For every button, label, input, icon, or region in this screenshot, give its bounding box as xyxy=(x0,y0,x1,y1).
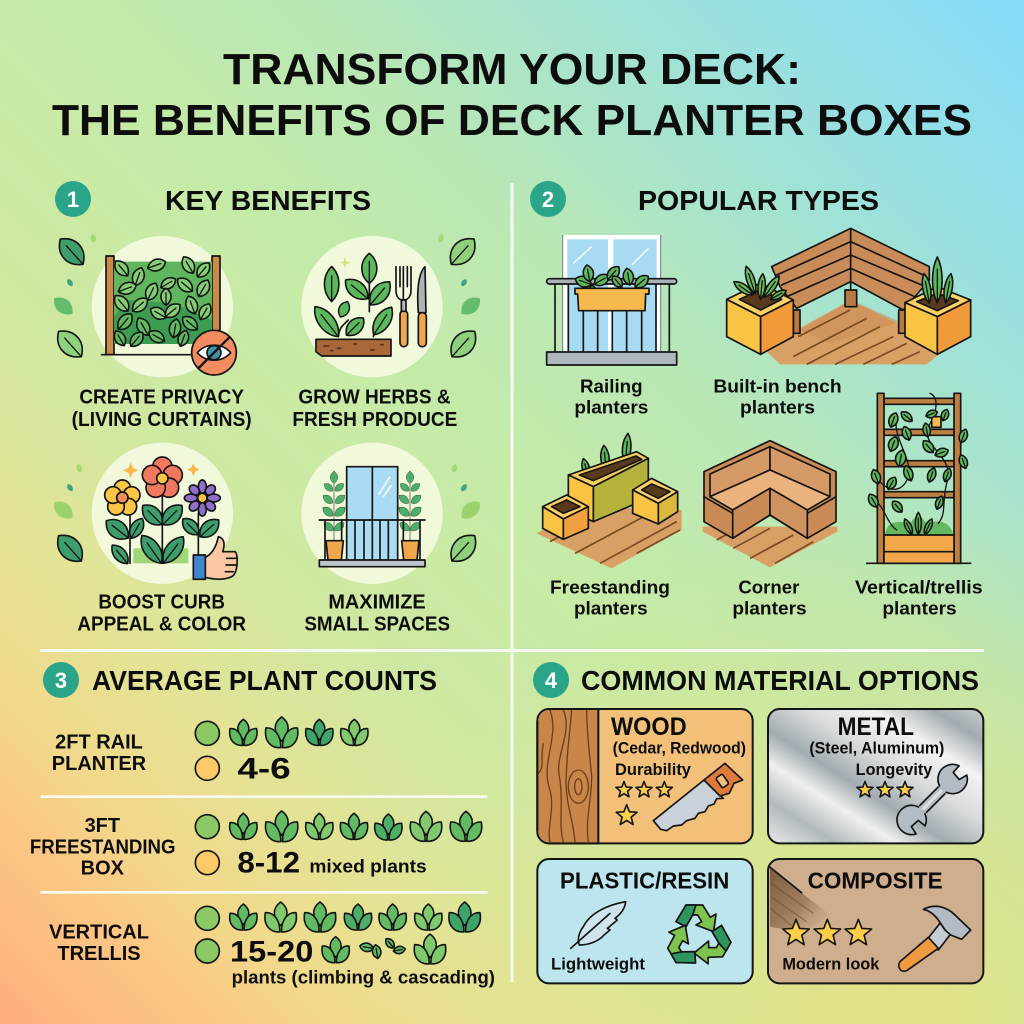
label: maximize small spaces: SMALL SPACES xyxy=(304,614,450,636)
icon: balcony small space xyxy=(319,467,425,567)
row: 2ft rail planter: 4-6 xyxy=(237,752,291,785)
title: TRANSFORM YOUR DECK: xyxy=(223,45,801,94)
row: 2ft rail planter xyxy=(52,717,368,785)
label: freestanding planters: planters xyxy=(574,597,648,618)
label: railing planters xyxy=(574,375,648,417)
heading: popular types xyxy=(530,181,879,217)
card: plastic/resin xyxy=(537,859,753,983)
icon: living curtain privacy hedge xyxy=(102,254,220,355)
icon: herbs and cutlery xyxy=(309,253,426,356)
card: metal xyxy=(768,709,983,843)
card: composite: COMPOSITE xyxy=(808,867,943,893)
icon: corner planter xyxy=(703,441,837,567)
heading: popular types: POPULAR TYPES xyxy=(638,185,879,216)
row: 3ft freestanding box xyxy=(30,811,482,880)
panel: popular types xyxy=(530,181,983,618)
heading: popular types: 2 xyxy=(542,187,554,212)
label: grow herbs xyxy=(292,386,457,431)
card: wood xyxy=(537,709,753,843)
row: 2ft rail planter: 2FT RAIL xyxy=(55,732,143,754)
label: maximize small spaces: MAXIMIZE xyxy=(328,591,426,613)
row: 2ft rail planter: PLANTER xyxy=(52,753,147,775)
row: vertical trellis: VERTICAL xyxy=(49,922,149,944)
icon circle backgrounds xyxy=(92,236,443,584)
label: grow herbs: GROW HERBS & xyxy=(298,386,451,408)
row: 3ft freestanding box: BOX xyxy=(81,858,125,880)
row: 3ft freestanding box: FREESTANDING xyxy=(30,836,175,858)
icon: hammer xyxy=(899,906,971,971)
row: vertical trellis xyxy=(49,902,495,987)
heading: key benefits xyxy=(55,181,371,217)
card: composite xyxy=(768,859,983,983)
card: metal: METAL xyxy=(838,714,914,741)
label: vertical trellis planters: Vertical/trellis xyxy=(855,576,983,597)
label: corner planters: planters xyxy=(732,597,807,618)
icon: saw xyxy=(653,763,743,831)
row: vertical trellis: plants (climbing & cascading) xyxy=(232,966,495,987)
label: boost curb appeal xyxy=(77,591,247,636)
decorative leaves xyxy=(50,232,484,568)
row: 3ft freestanding box: 8-12 xyxy=(237,847,300,880)
icon: no-see eye xyxy=(192,330,236,375)
label: boost curb appeal: BOOST CURB xyxy=(98,591,225,613)
label: freestanding planters xyxy=(550,576,670,618)
card: wood: WOOD xyxy=(611,714,687,741)
heading: average plant counts: 3 xyxy=(55,668,67,693)
label: freestanding planters: Freestanding xyxy=(550,576,670,597)
icon: railing planter xyxy=(547,235,677,365)
card: wood: Durability xyxy=(615,760,692,779)
heading: key benefits: 1 xyxy=(67,187,79,212)
card: plastic/resin: Lightweight xyxy=(551,954,645,973)
heading: key benefits: KEY BENEFITS xyxy=(165,185,371,216)
row: vertical trellis: 15-20 xyxy=(230,936,313,969)
label: corner planters: Corner xyxy=(738,576,799,597)
card: metal: (Steel, Aluminum) xyxy=(809,738,944,757)
label: grow herbs: FRESH PRODUCE xyxy=(292,409,457,431)
label: vertical trellis planters: planters xyxy=(882,597,957,618)
label: built-in bench planters: Built-in bench xyxy=(713,375,842,396)
icon: wrench xyxy=(891,759,972,840)
label: corner planters xyxy=(732,576,807,618)
icon: feather xyxy=(571,902,626,948)
card: plastic/resin: PLASTIC/RESIN xyxy=(560,867,729,893)
row: 3ft freestanding box: 3FT xyxy=(85,815,120,837)
panel: key benefits xyxy=(50,181,484,636)
icon: recycle xyxy=(661,905,736,971)
icon: built-in bench planter xyxy=(727,228,971,364)
label: create privacy: (LIVING CURTAINS) xyxy=(72,409,252,431)
icon: vertical trellis planter xyxy=(866,393,971,563)
label: railing planters: planters xyxy=(574,396,648,417)
label: railing planters: Railing xyxy=(580,375,643,396)
card: metal: Longevity xyxy=(856,760,933,779)
label: vertical trellis planters xyxy=(855,576,983,618)
heading: common material options: COMMON MATERIAL OPTIONS xyxy=(581,665,979,696)
card: wood: (Cedar, Redwood) xyxy=(613,738,746,757)
title xyxy=(52,45,972,145)
label: boost curb appeal: APPEAL & COLOR xyxy=(77,614,247,636)
heading: common material options: 4 xyxy=(545,668,558,693)
row: 3ft freestanding box: mixed plants xyxy=(309,856,427,877)
label: maximize small spaces xyxy=(304,591,450,636)
card: composite: Modern look xyxy=(782,954,880,973)
title: THE BENEFITS OF DECK PLANTER BOXES xyxy=(52,96,972,145)
heading: average plant counts: AVERAGE PLANT COUNTS xyxy=(92,665,437,696)
icon: flowers and thumbs up xyxy=(101,457,237,579)
icon: freestanding planters xyxy=(537,433,682,568)
panel: common material options xyxy=(533,662,983,983)
label: built-in bench planters xyxy=(713,375,842,417)
panel: average plant counts xyxy=(30,662,495,987)
row: vertical trellis: TRELLIS xyxy=(57,943,141,965)
label: built-in bench planters: planters xyxy=(740,396,815,417)
label: create privacy xyxy=(72,386,252,431)
label: create privacy: CREATE PRIVACY xyxy=(79,386,244,408)
